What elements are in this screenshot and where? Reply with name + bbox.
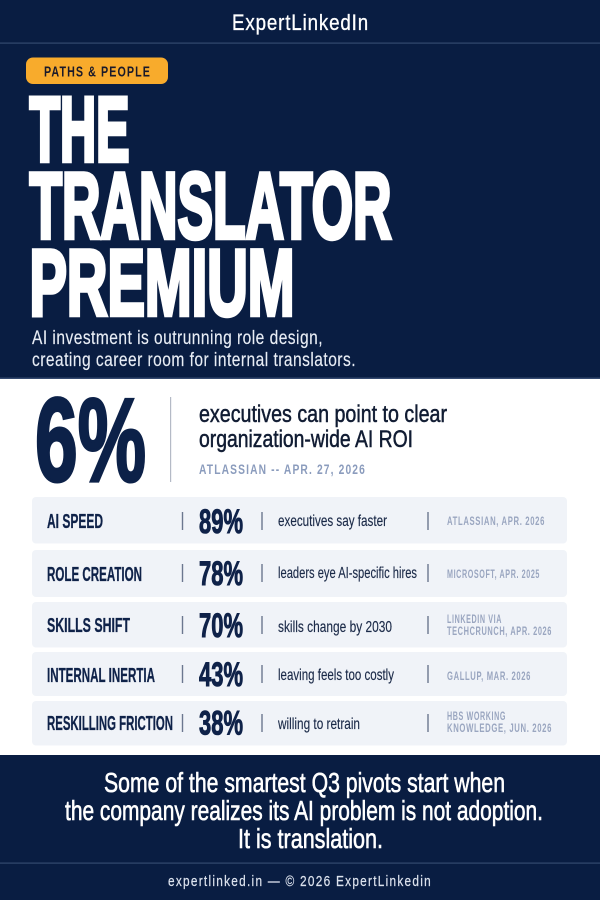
row: internal inertia: INTERNAL INERTIA (47, 665, 155, 687)
row: AI speed (32, 497, 567, 544)
row: AI speed: executives say faster (278, 513, 387, 530)
row: AI speed: 89% (199, 503, 243, 541)
title: PREMIUM (30, 230, 294, 335)
row: AI speed: ATLASSIAN, APR. 2026 (447, 514, 545, 528)
row: reskilling friction: RESKILLING FRICTION (47, 713, 173, 735)
row: role creation (32, 550, 567, 597)
closing statement: It is translation. (238, 823, 383, 854)
row: reskilling friction: HBS WORKING (447, 709, 506, 723)
hero description (199, 401, 447, 453)
hero source: ATLASSIAN -- APR. 27, 2026 (199, 462, 366, 477)
brand name: ExpertLinkedIn (232, 10, 369, 35)
title: THE (30, 79, 130, 181)
badge: paths and people: PATHS & PEOPLE (44, 64, 151, 80)
closing panel (0, 755, 600, 900)
title (30, 79, 392, 335)
hero description: organization-wide AI ROI (199, 426, 413, 453)
row: role creation: ROLE CREATION (47, 564, 142, 586)
subtitle (32, 327, 356, 371)
row: AI speed: AI SPEED (47, 511, 103, 533)
row: internal inertia: GALLUP, MAR. 2026 (447, 669, 531, 683)
footer credit: expertlinked.in — © 2026 ExpertLinkedin (168, 873, 432, 890)
hero stat: 6%: 6% (35, 374, 146, 507)
row: role creation: 78% (199, 555, 243, 593)
badge: paths and people (26, 58, 168, 84)
subtitle: creating career room for internal translators. (32, 349, 356, 371)
row: skills shift (32, 602, 567, 648)
row: internal inertia (32, 652, 567, 696)
row: internal inertia: leaving feels too costly (278, 667, 394, 684)
row: reskilling friction: 38% (199, 704, 243, 742)
closing statement (65, 767, 543, 854)
row: reskilling friction: willing to retrain (277, 716, 360, 733)
hero stat: 6% (35, 374, 447, 507)
row: reskilling friction (32, 701, 567, 746)
row: skills shift: skills change by 2030 (278, 619, 392, 636)
row: skills shift: SKILLS SHIFT (47, 615, 130, 637)
row: role creation: MICROSOFT, APR. 2025 (447, 567, 540, 581)
row: internal inertia: 43% (199, 656, 243, 694)
hero description: executives can point to clear (199, 401, 447, 428)
row: role creation: leaders eye AI-specific hires (278, 565, 417, 582)
row: skills shift: LINKEDIN VIA (447, 612, 502, 626)
subtitle: AI investment is outrunning role design, (32, 327, 323, 349)
row: skills shift: 70% (199, 607, 243, 645)
